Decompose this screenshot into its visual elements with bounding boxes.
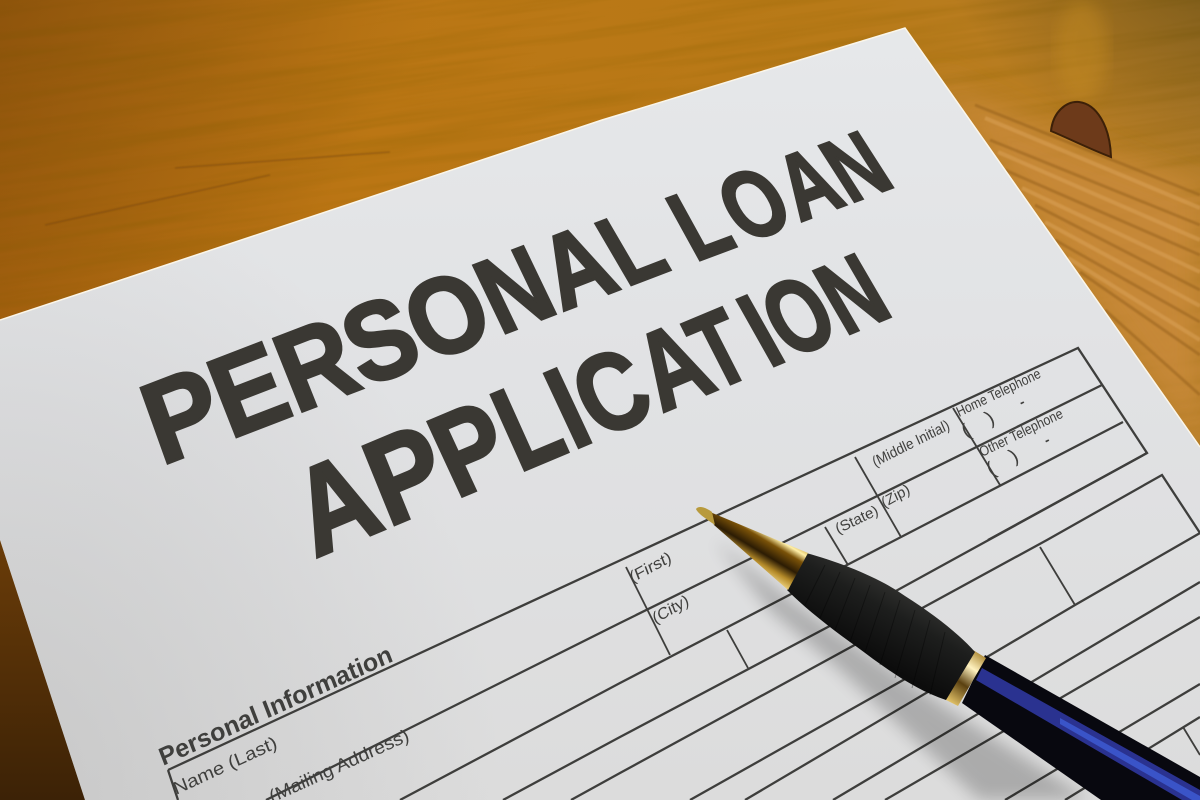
form grid lines <box>168 348 1200 800</box>
icon: wood knot <box>1051 102 1111 157</box>
form labels: (Middle Initial) <box>870 418 952 471</box>
heading: PERSONAL LOAN: A <box>520 201 632 332</box>
pen tip <box>696 507 715 525</box>
form labels: Other Telephone <box>977 406 1066 461</box>
heading: APPLICATION: I <box>528 344 607 473</box>
heading: PERSONAL LOAN: A <box>758 128 859 241</box>
heading: APPLICATION: A <box>273 424 397 583</box>
heading: PERSONAL LOAN: N <box>803 113 909 221</box>
heading: PERSONAL LOAN: S <box>324 271 436 410</box>
pen barrel <box>962 655 1200 800</box>
icon: ballpoint pen <box>696 507 1200 800</box>
heading: APPLICATION: O <box>742 252 855 379</box>
heading: APPLICATION: I <box>721 274 801 389</box>
heading: APPLICATION: A <box>615 299 731 434</box>
heading: APPLICATION: L <box>474 352 581 496</box>
heading: PERSONAL LOAN: O <box>386 246 509 385</box>
heading: PERSONAL LOAN: L <box>579 188 684 306</box>
form labels: (State) <box>833 503 881 538</box>
form labels: ( <box>957 420 975 442</box>
form labels: (First) <box>627 549 674 587</box>
form labels: ) <box>1005 445 1023 467</box>
pen gold band <box>944 650 986 706</box>
form labels: Name (Last) <box>170 732 280 799</box>
form labels: ( <box>982 458 1000 480</box>
form labels: ) <box>981 407 999 429</box>
heading: PERSONAL LOAN: N <box>458 224 572 357</box>
heading: PERSONAL LOAN: R <box>258 293 374 436</box>
heading: APPLICATION: P <box>411 376 529 522</box>
heading: PERSONAL LOAN: P <box>126 341 238 489</box>
pen gold cone <box>710 512 808 590</box>
form labels: - <box>1015 394 1028 410</box>
form labels <box>170 366 1066 800</box>
pen rubber grip <box>787 553 975 700</box>
form labels: (Zip) <box>879 482 913 512</box>
pen barrel blue highlight <box>976 668 1200 800</box>
heading: APPLICATION: P <box>347 399 465 552</box>
pen shadow <box>715 540 1090 800</box>
form section label: Personal Information: Personal Information <box>155 640 396 772</box>
heading: PERSONAL LOAN: E <box>192 318 305 462</box>
heading: APPLICATION: N <box>798 233 907 356</box>
form labels: (City) <box>650 592 691 628</box>
heading: APPLICATION: C <box>553 323 670 461</box>
form labels: Home Telephone <box>954 366 1043 421</box>
form labels: - <box>1040 432 1053 448</box>
heading: PERSONAL LOAN <box>126 113 909 489</box>
heading: APPLICATION <box>273 233 907 583</box>
heading: APPLICATION: T <box>670 287 767 412</box>
heading: PERSONAL LOAN: L <box>651 166 750 282</box>
heading: PERSONAL LOAN: O <box>699 145 809 262</box>
